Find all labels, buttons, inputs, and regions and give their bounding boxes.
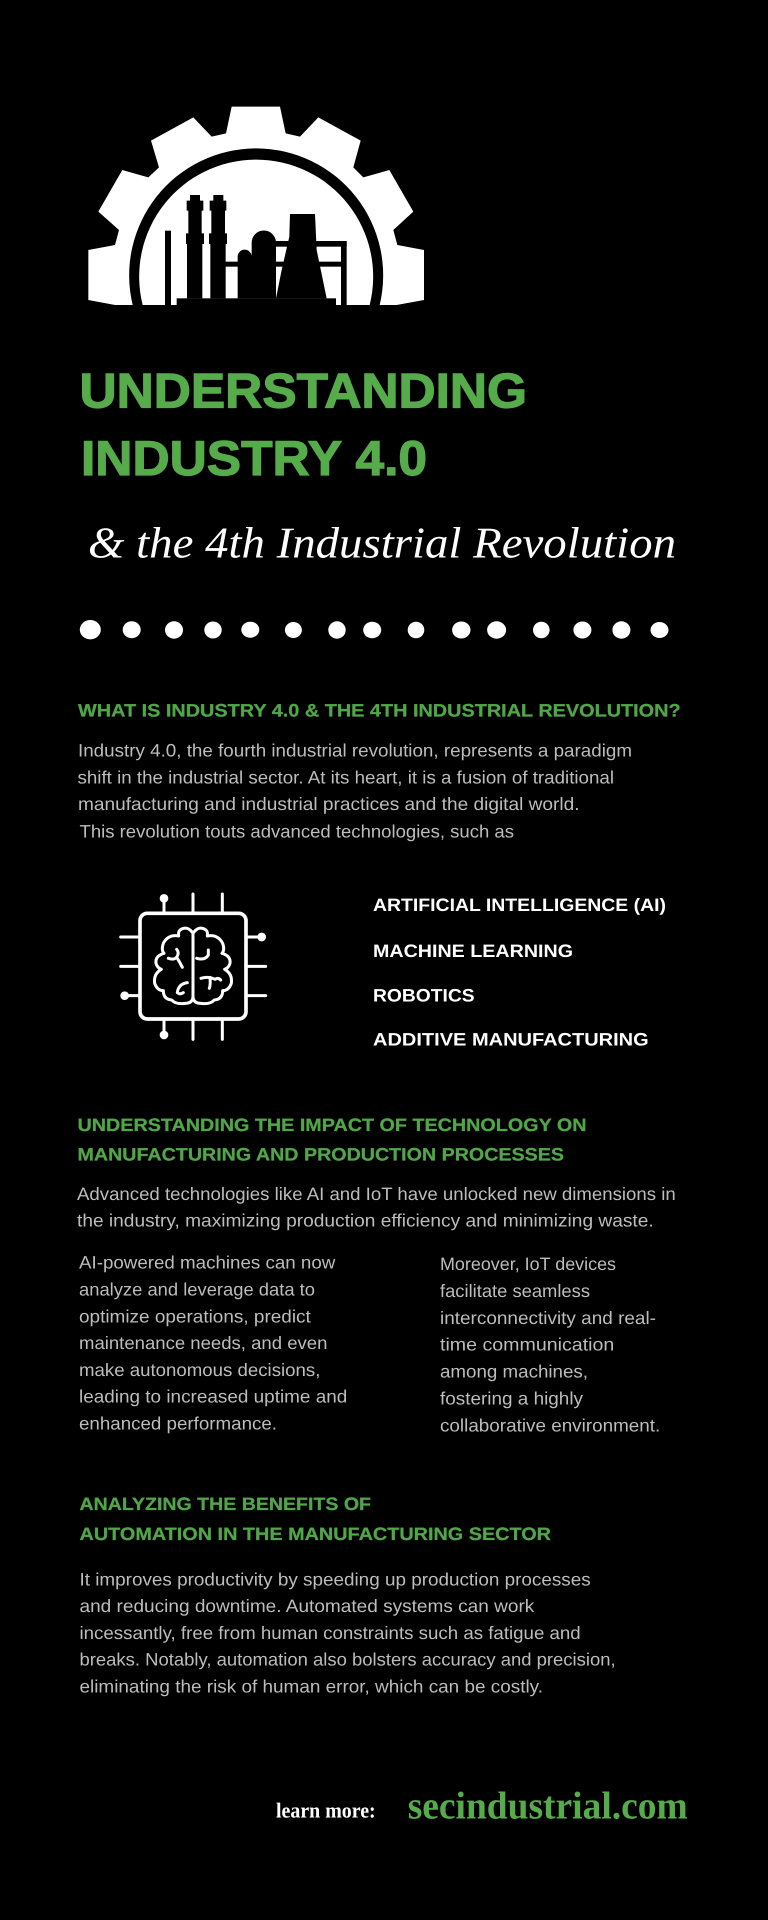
text block: AI-powered machines: AI-powered machines can now <box>79 1252 336 1272</box>
text block: IoT devices: fostering a highly <box>440 1389 583 1409</box>
text block: automation benefits: breaks. Notably, automation also bolsters accuracy and precision, <box>80 1650 616 1670</box>
text block: industry 4.0 intro: shift in the industrial sector. At its heart, it is a fusion of traditional <box>78 767 614 787</box>
text block: automation benefits: eliminating the risk of human error, which can be costly. <box>80 1677 543 1697</box>
text block: IoT devices: among machines, <box>440 1362 588 1382</box>
text block: industry 4.0 intro <box>78 741 632 842</box>
text block: automation benefits: incessantly, free from human constraints such as fatigue and <box>80 1623 581 1643</box>
text block: AI-powered machines: enhanced performance. <box>79 1414 277 1434</box>
text block: AI-powered machines <box>79 1252 347 1434</box>
text block: AI-powered machines: optimize operations, predict <box>79 1306 311 1326</box>
icon: brain on a chip <box>120 894 266 1039</box>
heading: benefits of automation: AUTOMATION IN THE MANUFACTURING SECTOR <box>80 1524 551 1544</box>
text block: IoT devices: interconnectivity and real- <box>440 1308 656 1328</box>
title <box>80 365 527 486</box>
icon: gear with factory <box>88 107 424 305</box>
footer: learn more: learn more: <box>276 1798 376 1822</box>
text block: AI-powered machines: analyze and leverage data to <box>79 1279 315 1299</box>
heading: benefits of automation <box>80 1494 551 1544</box>
text block: IoT devices: collaborative environment. <box>440 1415 660 1435</box>
text block: industry 4.0 intro: Industry 4.0, the fourth industrial revolution, represents a paradigm <box>78 741 632 761</box>
text block: industry 4.0 intro: This revolution touts advanced technologies, such as <box>80 822 514 842</box>
text block: automation benefits <box>80 1569 616 1697</box>
text block: IoT devices: time communication <box>440 1335 614 1355</box>
heading: impact of technology <box>78 1115 586 1165</box>
heading: impact of technology: MANUFACTURING AND PRODUCTION PROCESSES <box>78 1145 564 1165</box>
text block: IoT devices: facilitate seamless <box>440 1281 590 1301</box>
heading: benefits of automation: ANALYZING THE BENEFITS OF <box>80 1494 371 1514</box>
heading: impact of technology: UNDERSTANDING THE IMPACT OF TECHNOLOGY ON <box>78 1115 586 1135</box>
text block: AI-powered machines: maintenance needs, and even <box>79 1333 327 1353</box>
text block: advanced technologies intro: the industry, maximizing production efficiency and minimizing waste. <box>77 1211 654 1231</box>
list: advanced technologies <box>373 895 666 1049</box>
list: advanced technologies: ROBOTICS <box>373 985 475 1005</box>
text block: automation benefits: and reducing downtime. Automated systems can work <box>80 1596 535 1616</box>
text block: AI-powered machines: make autonomous decisions, <box>79 1360 320 1380</box>
text block: industry 4.0 intro: manufacturing and industrial practices and the digital world. <box>78 794 580 814</box>
text block: advanced technologies intro <box>77 1184 676 1231</box>
text block: IoT devices <box>440 1254 660 1435</box>
dotted divider <box>80 620 669 639</box>
title: INDUSTRY 4.0 <box>81 432 427 486</box>
list: advanced technologies: ARTIFICIAL INTELLIGENCE (AI) <box>373 895 666 915</box>
text block: advanced technologies intro: Advanced technologies like AI and IoT have unlocked new dimensions in <box>77 1184 676 1204</box>
heading: what is industry 4.0: WHAT IS INDUSTRY 4.0 & THE 4TH INDUSTRIAL REVOLUTION? <box>78 701 681 721</box>
text block: automation benefits: It improves productivity by speeding up production processes <box>80 1569 591 1589</box>
title: UNDERSTANDING <box>80 365 527 419</box>
text block: IoT devices: Moreover, IoT devices <box>440 1254 616 1274</box>
footer: website: secindustrial.com <box>408 1784 688 1827</box>
text block: AI-powered machines: leading to increased uptime and <box>79 1387 347 1407</box>
list: advanced technologies: MACHINE LEARNING <box>373 941 573 961</box>
list: advanced technologies: ADDITIVE MANUFACTURING <box>373 1029 649 1049</box>
subtitle: & the 4th Industrial Revolution <box>88 518 676 567</box>
